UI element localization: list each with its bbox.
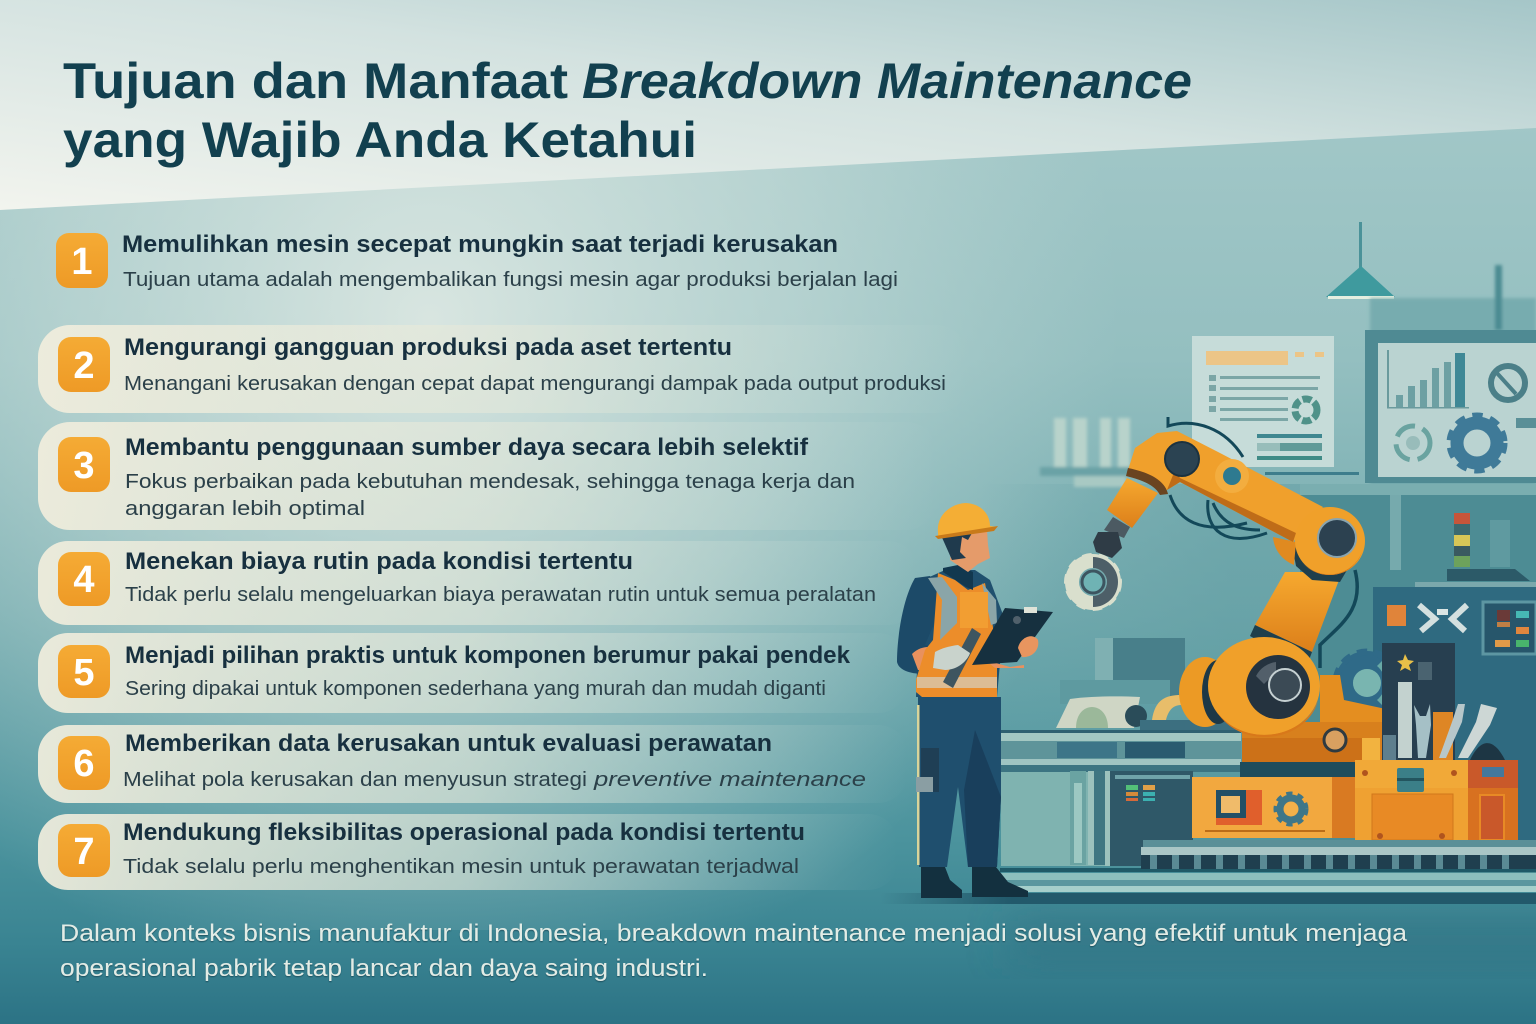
tool in hand: [943, 628, 981, 688]
conveyor platform: [1141, 840, 1536, 869]
cables: [1168, 417, 1357, 668]
item 2: 2: [73, 345, 95, 387]
hanging lamp: [1326, 222, 1395, 299]
closing paragraph: Dalam konteks bisnis manufaktur di Indonesia, breakdown maintenance menjadi solusi yang efektif untuk menjaga: [60, 920, 1408, 947]
forearm skin: [912, 647, 938, 670]
workbench: [1001, 638, 1250, 866]
arm left: [897, 576, 944, 674]
item 5: [38, 633, 908, 713]
item 3: Fokus perbaikan pada kebutuhan mendesak, sehingga tenaga kerja dan: [125, 471, 855, 493]
item 6: Memberikan data kerusakan untuk evaluasi perawatan: [125, 730, 772, 757]
legs: [916, 697, 1001, 867]
gear held by gripper: [1067, 556, 1119, 608]
item 1: Memulihkan mesin secepat mungkin saat terjadi kerusakan: [122, 231, 838, 258]
closing paragraph: [60, 920, 1408, 982]
item 6: [38, 725, 908, 803]
item 6: preventive maintenance: [593, 769, 866, 791]
item 3: 3: [73, 445, 95, 487]
orange machine base: [1192, 777, 1355, 838]
gripper: [1093, 517, 1130, 558]
item 3: [38, 422, 938, 530]
upper arm: [1255, 572, 1342, 652]
base body: [1240, 675, 1400, 778]
item 7: [38, 814, 898, 890]
item 7: Mendukung fleksibilitas operasional pada kondisi tertentu: [123, 819, 805, 846]
item 4: Tidak perlu selalu mengeluarkan biaya perawatan rutin untuk semua peralatan: [125, 584, 876, 606]
vest: [916, 573, 997, 697]
wall band: [1040, 265, 1536, 498]
signal tower: [1454, 513, 1470, 567]
title: Breakdown Maintenance: [582, 53, 1192, 109]
item 3: Membantu penggunaan sumber daya secara lebih selektif: [125, 434, 809, 461]
item 5: Menjadi pilihan praktis untuk komponen berumur pakai pendek: [125, 642, 851, 669]
toolbox: [1355, 760, 1518, 847]
poster: dashboard: [1365, 330, 1536, 483]
roll on bench: [1056, 696, 1147, 728]
item 3: anggaran lebih optimal: [125, 498, 365, 520]
item 6: Melihat pola kerusakan dan menyusun strategi: [123, 769, 587, 791]
right hand: [1018, 636, 1038, 657]
dark elbow collar: [1292, 530, 1350, 582]
item 2: Menangani kerusakan dengan cepat dapat mengurangi dampak pada output produksi: [124, 373, 946, 395]
item 7: Tidak selalu perlu menghentikan mesin untuk perawatan terjadwal: [123, 856, 799, 878]
helmet: [935, 503, 998, 539]
forearm: [1128, 431, 1323, 542]
title: Tujuan dan Manfaat: [63, 53, 568, 109]
boots: [921, 867, 1028, 898]
elbow: [1295, 507, 1365, 575]
item 5: 5: [73, 652, 95, 694]
item 2: [38, 325, 968, 413]
glove: [933, 645, 970, 670]
item 4: Menekan biaya rutin pada kondisi tertentu: [125, 548, 633, 575]
item 1: Tujuan utama adalah mengembalikan fungsi mesin agar produksi berjalan lagi: [123, 269, 898, 291]
upper joint: [1165, 442, 1249, 493]
main joint: [1208, 637, 1320, 737]
item 1: 1: [71, 241, 93, 283]
closing paragraph: operasional pabrik tetap lancar dan daya saing industri.: [60, 955, 708, 982]
item 4: [38, 541, 918, 625]
icon: gear on dashboard: [1450, 416, 1504, 470]
factory background: [1040, 222, 1536, 884]
collar: [943, 565, 973, 590]
floor: [880, 868, 1536, 955]
item 4: 4: [73, 559, 95, 601]
list of benefits: [38, 231, 968, 890]
poster: checklist: [1192, 336, 1359, 475]
icon: gear on base: [1276, 794, 1306, 824]
item 7: 7: [73, 831, 95, 873]
tools in toolbox: [1362, 643, 1505, 760]
header band: [0, 0, 1536, 210]
robot arm: [1067, 417, 1406, 778]
item 2: Mengurangi gangguan produksi pada aset tertentu: [124, 334, 732, 361]
head: [940, 530, 990, 572]
torso: [916, 570, 1002, 697]
title: yang Wajib Anda Ketahui: [63, 112, 697, 168]
clipboard: [972, 607, 1053, 665]
rear hub: [1179, 657, 1234, 727]
elbow orange tab: [1273, 537, 1296, 565]
shoulder gear: [1336, 652, 1406, 714]
item 5: Sering dipakai untuk komponen sederhana yang murah dan mudah diganti: [125, 678, 826, 700]
control machine: [1373, 567, 1536, 870]
item 6: 6: [73, 743, 95, 785]
worker: [897, 503, 1053, 898]
forearm right: [985, 660, 1024, 668]
item 1: [56, 231, 898, 291]
wrist link: [1107, 468, 1168, 528]
title: [63, 53, 1192, 168]
